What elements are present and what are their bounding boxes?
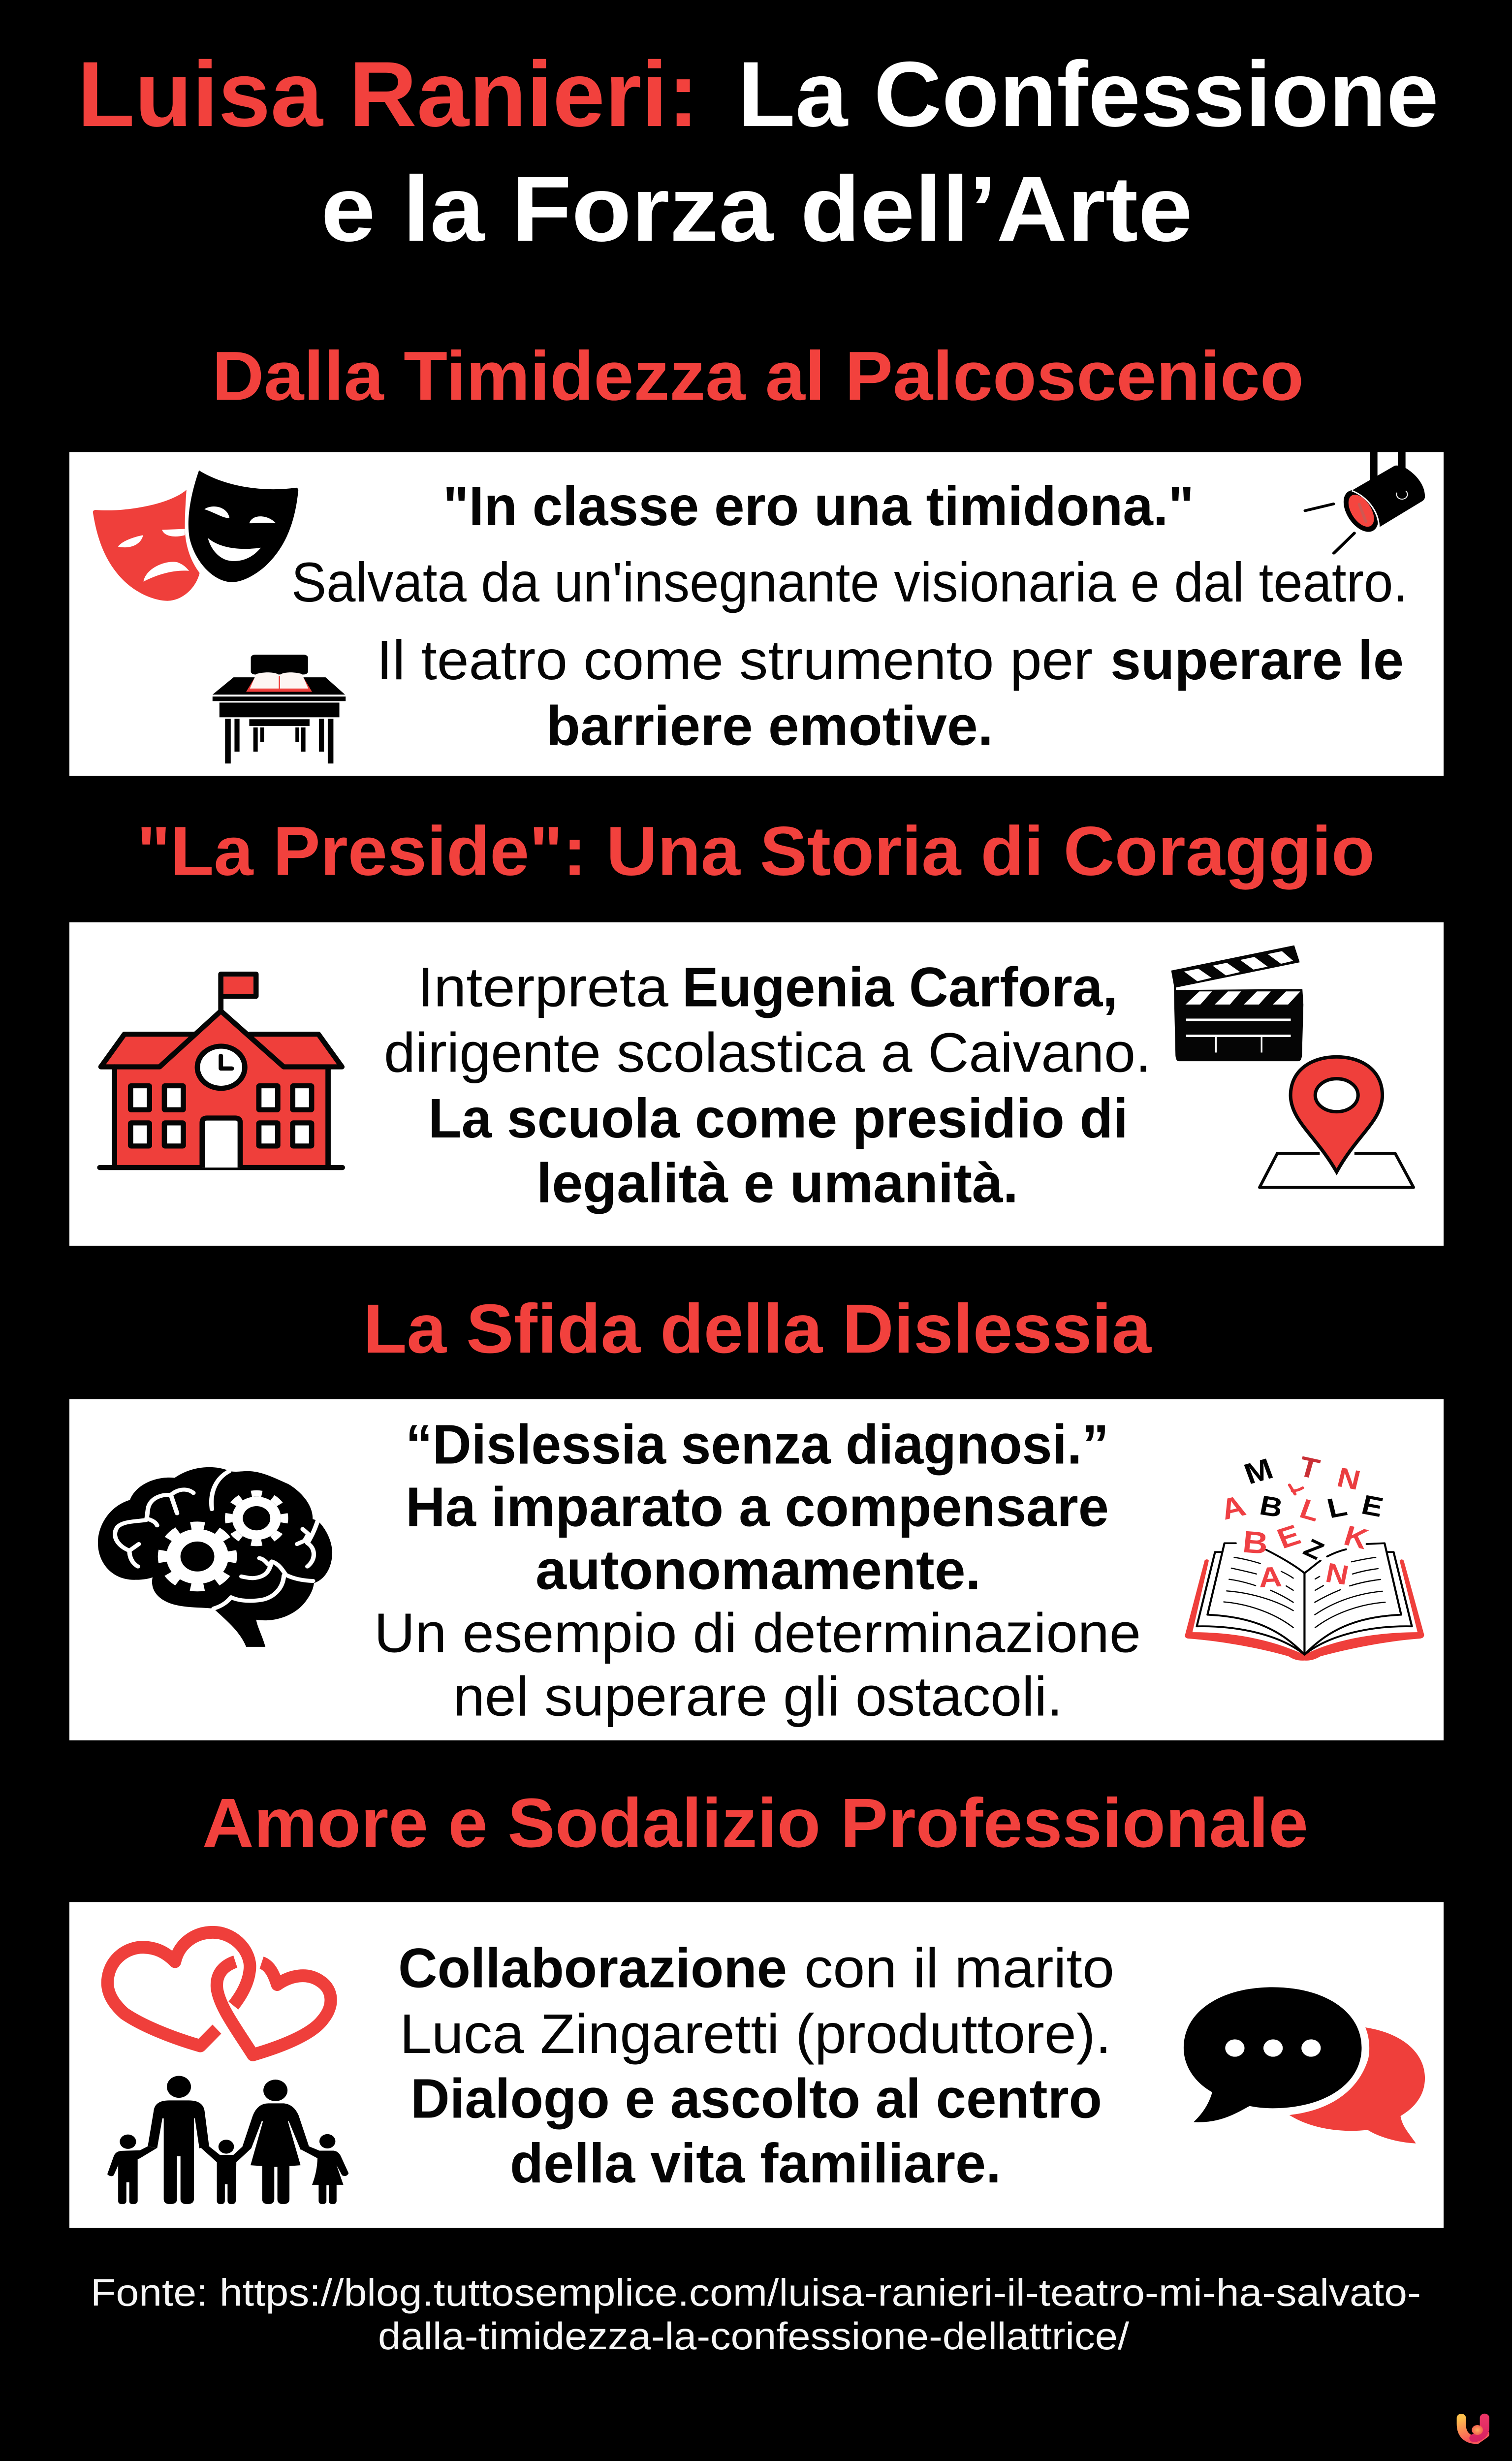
icon: interlocked hearts	[107, 1932, 331, 2055]
text block: teatro: "In classe ero una timidona."	[443, 475, 1194, 537]
icon: theatre masks	[93, 471, 298, 601]
text block: collaborazione: con il marito	[804, 1937, 1114, 1999]
icon: open book with scattered letters: N	[1334, 1461, 1363, 1496]
text block: dislessia: autonomamente.	[536, 1539, 981, 1601]
panel: Dalla Timidezza al Palcoscenico	[69, 451, 1444, 776]
icon: watermark logo	[1461, 2418, 1485, 2440]
icon: family holding hands	[107, 2076, 348, 2204]
icon: open book with scattered letters: A	[1217, 1489, 1249, 1526]
icon: spotlight	[1305, 451, 1425, 553]
title: e la Forza dell’Arte	[321, 157, 1193, 260]
text block: Eugenia Carfora: dirigente scolastica a Caivano.	[384, 1022, 1151, 1084]
icon: open book with scattered letters: K	[1340, 1519, 1372, 1555]
icon: open book with scattered letters: B	[1257, 1489, 1286, 1523]
text block: teatro	[291, 475, 1408, 757]
text block: Eugenia Carfora: Eugenia Carfora,	[682, 956, 1118, 1018]
icon: open book with scattered letters: B	[1241, 1525, 1269, 1561]
title	[77, 42, 1439, 260]
icon: open book with scattered letters: A	[1258, 1561, 1283, 1594]
text block: dislessia: “Dislessia senza diagnosi.”	[406, 1413, 1109, 1476]
text block: Eugenia Carfora: legalità e umanità.	[536, 1152, 1018, 1214]
icon: open book with scattered letters: L	[1324, 1490, 1350, 1524]
heading: La Preside: "La Preside": Una Storia di Coraggio	[137, 812, 1375, 890]
heading: Dalla Timidezza al Palcoscenico: Dalla Timidezza al Palcoscenico	[212, 337, 1304, 414]
source footer	[91, 2272, 1421, 2358]
heading: La Sfida della Dislessia: La Sfida della Dislessia	[363, 1290, 1152, 1367]
text block: Eugenia Carfora	[384, 956, 1151, 1214]
text block: dislessia	[374, 1413, 1141, 1728]
text block: collaborazione: della vita familiare.	[510, 2132, 1001, 2194]
icon: open book with scattered letters: T	[1295, 1451, 1323, 1485]
icon: speech bubbles	[1184, 1987, 1425, 2144]
text block: Eugenia Carfora: Interpreta	[417, 956, 669, 1018]
text block: teatro: superare le	[1110, 629, 1404, 692]
text block: dislessia: Un esempio di determinazione	[374, 1602, 1141, 1664]
icon: open book with scattered letters: Z	[1299, 1534, 1329, 1565]
icon: open book with scattered letters: E	[1273, 1519, 1305, 1555]
title: Luisa Ranieri:	[77, 42, 699, 146]
title: La Confessione	[738, 42, 1439, 146]
icon: open book with scattered letters	[1185, 1451, 1424, 1661]
text block: collaborazione: Dialogo e ascolto al centro	[410, 2067, 1102, 2130]
text block: teatro: Il teatro come strumento per	[377, 629, 1093, 692]
icon: open book with scattered letters: M	[1240, 1452, 1277, 1490]
text block: dislessia: Ha imparato a compensare	[406, 1476, 1109, 1538]
text block: collaborazione	[398, 1937, 1114, 2194]
source footer: dalla-timidezza-la-confessione-dellattrice/	[378, 2315, 1130, 2358]
text block: collaborazione: Collaborazione	[398, 1937, 787, 1999]
icon: open book with scattered letters: L	[1296, 1493, 1324, 1527]
panel: La Sfida della Dislessia	[69, 1399, 1444, 1740]
icon: open book with scattered letters: N	[1323, 1557, 1351, 1591]
icon: map location pin	[1260, 1057, 1414, 1187]
large gear	[162, 1525, 233, 1588]
icon: school building	[100, 974, 343, 1167]
icon: open book with scattered letters: E	[1358, 1489, 1386, 1523]
panel: La Preside	[69, 922, 1444, 1246]
icon: brain with gears	[98, 1467, 332, 1647]
small gear	[228, 1493, 284, 1543]
text block: teatro: barriere emotive.	[546, 695, 993, 757]
text block: Eugenia Carfora: La scuola come presidio di	[428, 1087, 1128, 1149]
text block: collaborazione: Luca Zingaretti (produttore).	[400, 2003, 1111, 2065]
source footer: Fonte: https://blog.tuttosemplice.com/luisa-ranieri-il-teatro-mi-ha-salvato-	[91, 2272, 1421, 2314]
heading: Amore e Sodalizio Professionale: Amore e Sodalizio Professionale	[202, 1784, 1308, 1862]
icon: clapperboard	[1171, 946, 1303, 1061]
icon: school desk with book	[213, 655, 346, 763]
panel: Amore e Sodalizio Professionale	[69, 1902, 1444, 2228]
text block: dislessia: nel superare gli ostacoli.	[453, 1665, 1063, 1728]
